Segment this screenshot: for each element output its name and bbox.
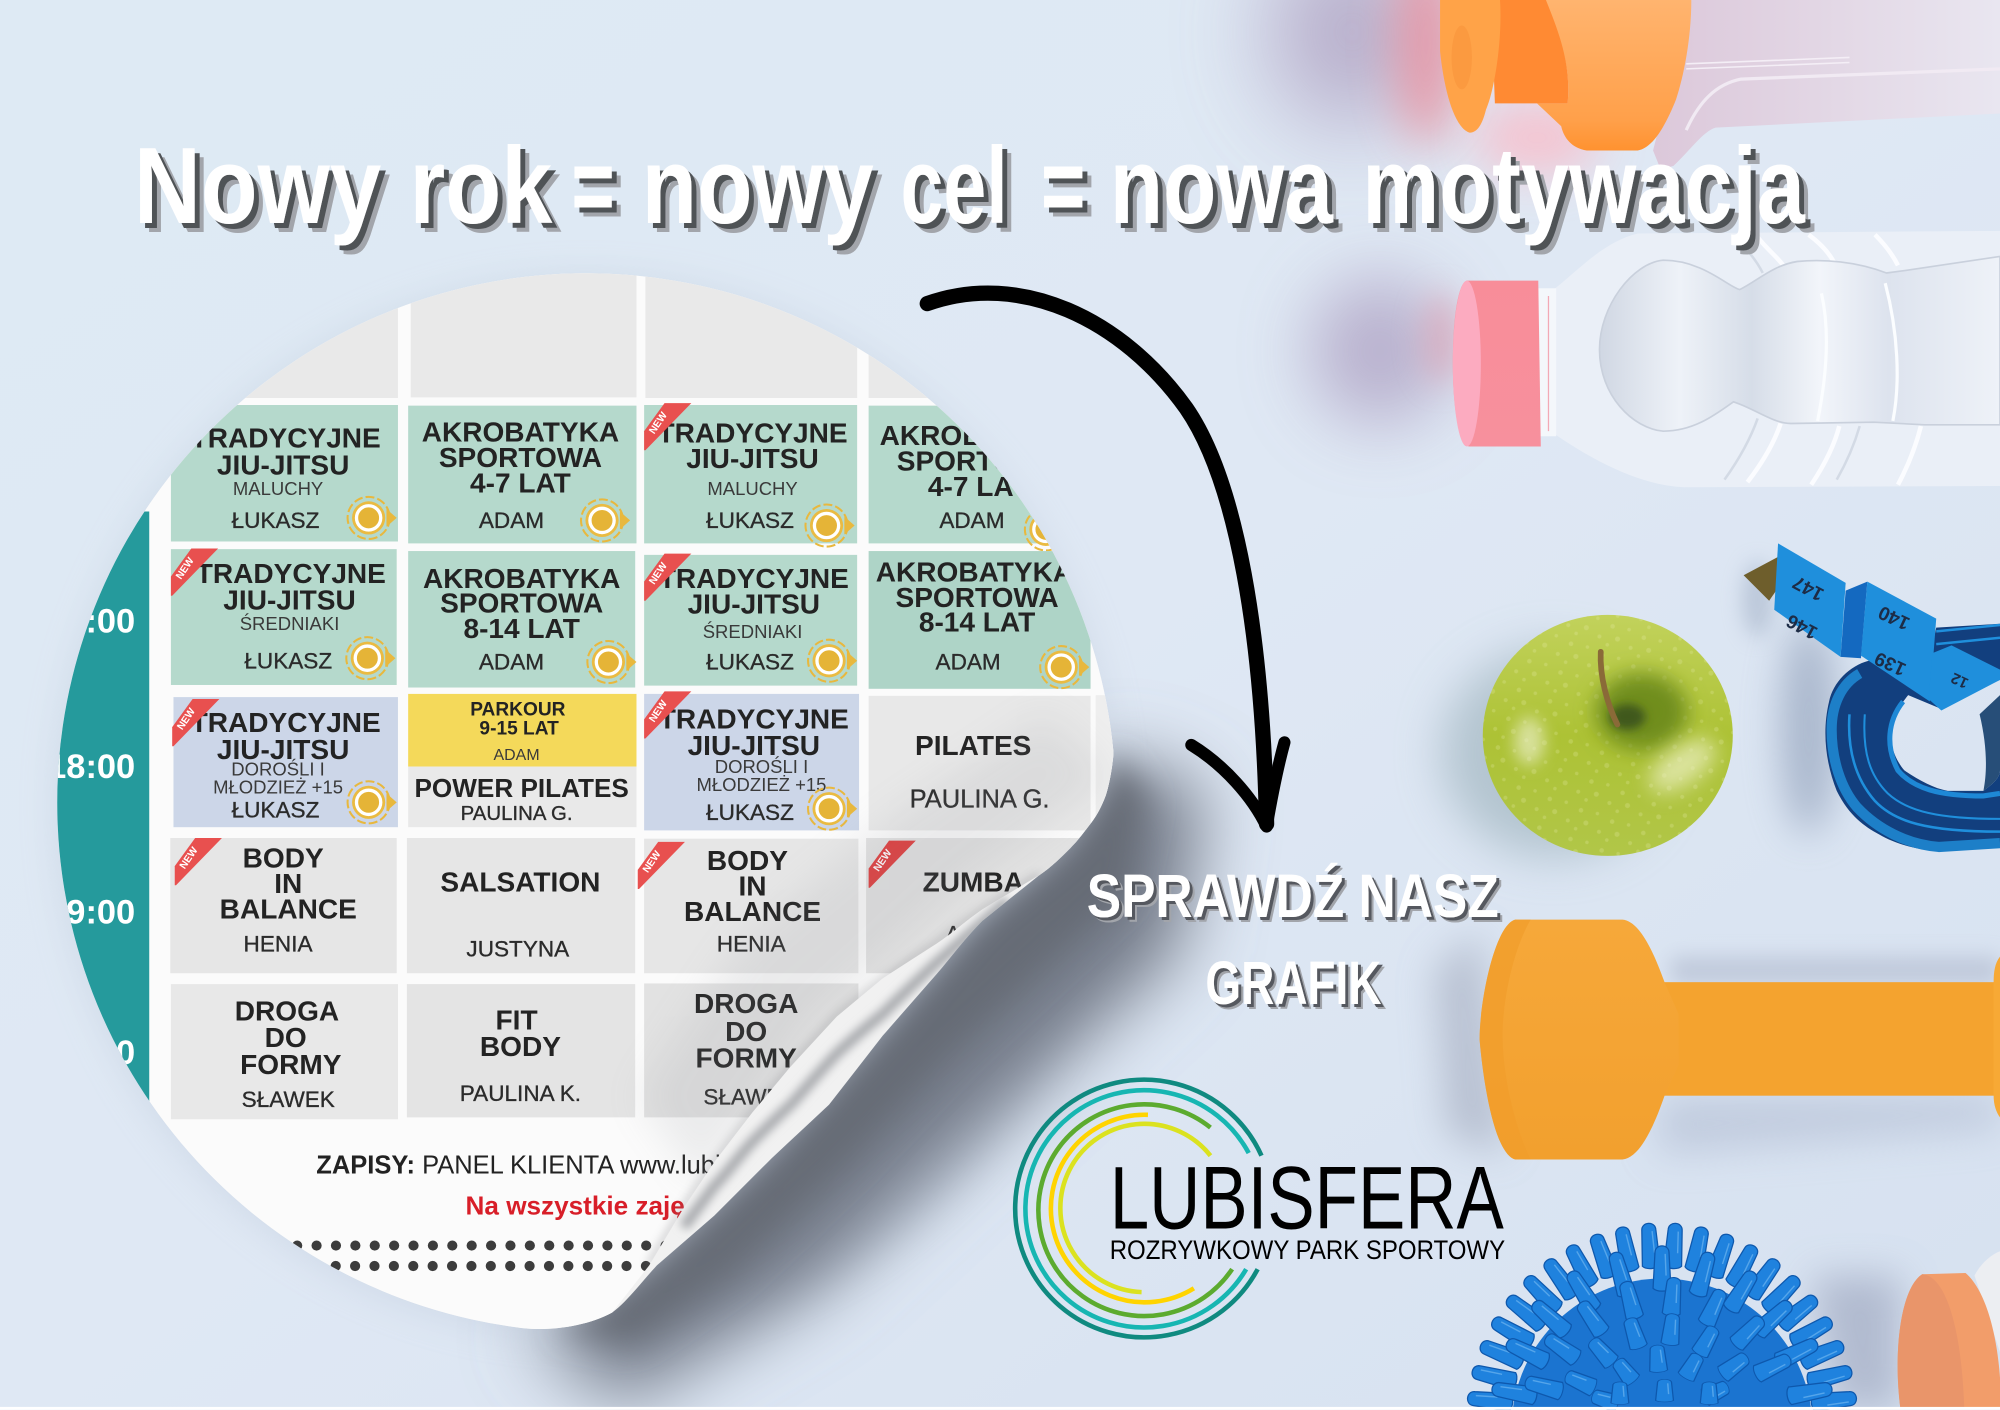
tape hole shading: [1980, 695, 2000, 791]
row 2: cell akrobatyka 8-14: SPORTOWA: [440, 587, 603, 618]
row 4: cell body in balance: BALANCE: [220, 893, 357, 924]
tape band three: [1929, 645, 2000, 710]
row 5: cell fit body: PAULINA K.: [460, 1081, 581, 1106]
new ribbon: NEW: [175, 706, 198, 732]
row 2: cell tradycyjne sredniaki: [171, 548, 397, 685]
row 3: cell tradycyjne dorosli second: TRADYCYJNE: [659, 703, 849, 734]
row 4: cell zumba: ANIA: [946, 921, 998, 946]
title: =: [1041, 125, 1085, 246]
row 3: cell tradycyjne dorosli second: [644, 691, 859, 830]
row 1: cell tradycyjne jiu-jitsu maluchy: [171, 405, 398, 541]
row 2: cell tradycyjne sredniaki second: ŁUKASZ: [706, 650, 794, 675]
title: motywacja: [1362, 125, 1805, 246]
tape numbers: 140: [1875, 601, 1913, 634]
arrow head: [1191, 742, 1284, 827]
row 4: cell salsation: SALSATION: [440, 867, 600, 898]
title: nowa: [1110, 125, 1333, 246]
call to action: GRAFIK: [1205, 949, 1381, 1017]
row 4: cell body in balance second: BALANCE: [684, 896, 821, 927]
row 1: cell tradycyjne jiu-jitsu maluchy: JIU-JITSU: [217, 450, 349, 481]
row 1: cell akrobatyka 4-7: [408, 406, 636, 543]
row 3: cell tradycyjne dorosli: MŁODZIEŻ +15: [213, 776, 343, 797]
row 3: cell pilates: [869, 695, 1114, 830]
row 5: cell droga do formy: FORMY: [240, 1049, 342, 1080]
row 1: cell tradycyjne jiu-jitsu maluchy: TRADYCYJNE: [191, 423, 381, 454]
soft ambient shadow: [57, 278, 1114, 1334]
photo: measuring tape: [1742, 543, 2000, 851]
apple body: [1483, 615, 1733, 856]
row 1: cell tradycyjne with new ribbon: [644, 403, 857, 547]
top empty row: [171, 230, 1098, 398]
row 4: cell zumba: [866, 838, 1096, 973]
footer: enrolment line: ZAPISY: PANEL KLIENTA www.lubisfera.pl: [316, 1151, 804, 1179]
orange shaker flange: [1537, 0, 1691, 151]
row 1: cell akrobatyka 4-7 second: AKROBATYKA: [880, 420, 1077, 451]
row 3: cell tradycyjne dorosli: [172, 697, 398, 827]
bottle ridges: [1747, 235, 1921, 485]
row 5: cell droga do formy: DO: [265, 1022, 307, 1053]
dumbbell handle: [1652, 982, 2000, 1096]
row 2: cell akrobatyka 8-14 second: [869, 551, 1091, 689]
row 2: cell tradycyjne sredniaki: ŁUKASZ: [244, 648, 332, 673]
white bottle behind cap: [1974, 1251, 2000, 1352]
tape brass tip: [1744, 556, 1781, 601]
soft coloured shadows behind bottles: [1269, 0, 1601, 425]
tape numbers: 147: [1790, 571, 1828, 605]
new ribbon: [644, 403, 691, 450]
row 3: cell parkour and power pilates: 9-15 LAT: [479, 719, 559, 740]
tape band two: [1861, 582, 1936, 702]
ball base: [1513, 1279, 1811, 1409]
title: cel: [901, 125, 1008, 246]
dark shadow under the curl: [555, 753, 1148, 1346]
row 5: cell fit body: BODY: [480, 1031, 561, 1062]
row 2: cell tradycyjne sredniaki second: JIU-JITSU: [688, 589, 820, 620]
translucent shaker body: [1653, 0, 2000, 170]
row 4: cell salsation: JUSTYNA: [466, 937, 569, 962]
row 5: cell droga do formy second: [644, 983, 858, 1117]
row 2: cell tradycyjne sredniaki: TRADYCYJNE: [196, 558, 386, 589]
arrow shaft: [927, 293, 1267, 824]
row 2: cell akrobatyka 8-14 second: 8-14 LAT: [919, 606, 1035, 637]
row 1: cell akrobatyka 4-7: 4-7 LAT: [470, 467, 571, 498]
call to action: [1087, 862, 1499, 1017]
row 2: cell tradycyjne sredniaki second: TRADYCYJNE: [659, 563, 849, 594]
photo: orange shaker bottle: [1440, 0, 2000, 170]
row 3: cell tradycyjne dorosli second: MŁODZIEŻ +15: [697, 774, 826, 795]
row 4: cell body in balance: BODY: [243, 842, 324, 873]
row 3: cell tradycyjne dorosli second: DOROŚLI I: [715, 756, 808, 777]
curved arrow: [927, 293, 1284, 827]
printed schedule: [0, 230, 1114, 1266]
apple stem: [1601, 652, 1617, 725]
footer: red note: Na wszystkie zajęcia obowiązują zapisy: [466, 1190, 957, 1220]
row 3: cell parkour and power pilates: PAULINA G.: [461, 803, 572, 825]
dumbbell shadow: [1435, 931, 1505, 1154]
row 3: cell parkour and power pilates: [408, 694, 636, 827]
photo: peach bottle cap: [1898, 1251, 2000, 1409]
tape numbers: 146: [1783, 609, 1821, 643]
photo: green apple: [1441, 615, 1733, 857]
row 3: cell parkour and power pilates: ADAM: [494, 747, 540, 764]
sticker drop shadow: [57, 278, 1205, 1403]
photo: blue spiky massage ball: [1467, 1223, 1857, 1410]
row 5: cell droga do formy: SŁAWEK: [242, 1087, 335, 1112]
row 2: cell tradycyjne sredniaki: JIU-JITSU: [223, 585, 356, 616]
row 4: cell body in balance: IN: [274, 868, 302, 899]
new ribbon: [644, 691, 691, 739]
tape coil: [1825, 624, 2000, 851]
row 4: cell body in balance second: IN: [739, 870, 767, 901]
row 1: cell tradycyjne jiu-jitsu maluchy: ŁUKASZ: [232, 508, 320, 533]
title: Nowy: [134, 125, 381, 246]
bottle inner bulge: [1599, 256, 2000, 431]
photo: water bottle: [1453, 231, 2000, 487]
row 1: cell akrobatyka 4-7 second: [869, 406, 1098, 550]
apple shading: [1514, 673, 1725, 803]
row 3: cell tradycyjne dorosli: DOROŚLI I: [231, 759, 325, 780]
row 1: cell tradycyjne jiu-jitsu maluchy: MALUCHY: [233, 478, 323, 499]
row 1: cell tradycyjne with new ribbon: JIU-JITSU: [686, 443, 819, 474]
footer: dotted strip: [297, 1246, 689, 1266]
row 4: cell body in balance second: [638, 839, 858, 973]
row 5: cell droga do formy: DROGA: [235, 995, 339, 1026]
row 2: cell tradycyjne sredniaki second: ŚREDNIAKI: [703, 621, 802, 642]
row 3: cell parkour and power pilates: PARKOUR: [470, 700, 566, 721]
row 3: cell pilates: PILATES: [915, 730, 1031, 761]
row 2: cell akrobatyka 8-14: [408, 551, 636, 688]
logo tagline: ROZRYWKOWY PARK SPORTOWY: [1110, 1235, 1505, 1265]
flap shading band: [684, 901, 1008, 1227]
tape coil bands: [1832, 673, 2000, 847]
new ribbon: [644, 554, 691, 601]
row 1: cell tradycyjne with new ribbon: MALUCHY: [707, 478, 798, 499]
title: [134, 125, 1805, 246]
calendar sticker: [0, 230, 1114, 1329]
new ribbon: [869, 841, 916, 888]
wide shadow under the curl: [523, 753, 1205, 1403]
row 5: cell droga do formy second: SŁAWEK: [703, 1085, 797, 1110]
new ribbon: NEW: [647, 410, 670, 436]
row 1: cell akrobatyka 4-7: ADAM: [479, 508, 544, 533]
new ribbon: NEW: [647, 561, 670, 587]
row 2: cell akrobatyka 8-14: 8-14 LAT: [463, 613, 580, 644]
tape numbers: 12: [1949, 669, 1971, 691]
row 2: cell akrobatyka 8-14 second: AKROBATYKA: [876, 557, 1073, 588]
broad shading toward the curl: [638, 714, 1110, 1186]
title: =: [571, 125, 615, 246]
row 5: cell fit body: FIT: [496, 1004, 538, 1035]
row 4: cell body in balance: HENIA: [244, 932, 313, 957]
contact shadow at the fold: [649, 875, 1040, 1265]
new ribbon: [638, 842, 685, 889]
new ribbon: NEW: [174, 556, 197, 582]
time column: [0, 512, 149, 1117]
row 4: cell zumba: ZUMBA: [923, 867, 1024, 898]
row 3: cell tradycyjne dorosli: TRADYCYJNE: [191, 707, 381, 738]
orange shaker nozzle: [1440, 0, 1500, 133]
photo: orange dumbbell: [1435, 920, 2000, 1159]
title: rok: [409, 125, 553, 246]
logo: Lubisfera: [1015, 1080, 1505, 1337]
ball spikes: [1467, 1223, 1857, 1410]
time column: 19:00: [47, 893, 135, 931]
new ribbon: [172, 699, 219, 746]
cap side: [1898, 1273, 2000, 1409]
row 3: cell tradycyjne dorosli second: ŁUKASZ: [706, 800, 794, 825]
row 3: cell tradycyjne dorosli second: JIU-JITSU: [688, 730, 820, 761]
row 4: cell body in balance second: HENIA: [717, 932, 786, 957]
row 2: cell akrobatyka 8-14 second: SPORTOWA: [895, 582, 1059, 613]
time column: 18:00: [47, 748, 135, 786]
row 3: cell tradycyjne dorosli: ŁUKASZ: [232, 798, 320, 823]
row 3: cell tradycyjne dorosli: JIU-JITSU: [217, 734, 349, 765]
new ribbon: [175, 838, 222, 885]
tape numbers: [1783, 571, 1971, 691]
call to action: SPRAWDŹ NASZ: [1087, 862, 1499, 930]
sticker paper: [57, 273, 1114, 1329]
row 1: cell akrobatyka 4-7: AKROBATYKA: [422, 416, 619, 447]
new ribbon: NEW: [641, 849, 664, 875]
tape shadow: [1781, 619, 1837, 835]
row 5: cell droga do formy: [171, 984, 398, 1119]
time labels: 17:00: [47, 603, 135, 641]
new ribbon: NEW: [872, 848, 895, 874]
row 2: cell tradycyjne sredniaki: ŚREDNIAKI: [240, 613, 339, 634]
new ribbon: NEW: [178, 845, 201, 871]
bottle body: [1548, 231, 2000, 487]
row 1: cell akrobatyka 4-7: SPORTOWA: [439, 442, 602, 473]
dumbbell second head: [1994, 957, 2000, 1117]
time column: 20:00: [47, 1034, 135, 1072]
row 5: cell droga do formy second: DROGA: [694, 988, 798, 1019]
new ribbon: NEW: [647, 698, 670, 725]
dumbbell head: [1480, 920, 1679, 1159]
row 4: cell body in balance second: BODY: [707, 845, 788, 876]
new ribbon: [171, 548, 218, 596]
row 1: cell tradycyjne with new ribbon: TRADYCYJNE: [657, 418, 848, 449]
row 1: cell akrobatyka 4-7 second: SPORTOWA: [897, 446, 1060, 477]
logo rings: [1015, 1080, 1261, 1337]
tape band one: [1774, 543, 1846, 657]
orange shaker neck: [1491, 0, 1568, 103]
peeled sticker flap: [57, 273, 1114, 1329]
row 2: cell akrobatyka 8-14 second: ADAM: [936, 650, 1001, 675]
row 3: cell pilates: PAULINA G.: [910, 785, 1050, 813]
row 5: cell fit body: [407, 984, 635, 1117]
row 1: cell akrobatyka 4-7 second: 4-7 LAT: [928, 471, 1029, 502]
row 5: cell droga do formy second: DO: [725, 1016, 767, 1047]
logo wordmark: LUBISFERA: [1110, 1147, 1504, 1247]
row 3: cell parkour and power pilates: POWER PILATES: [415, 773, 629, 803]
apple shadow: [1441, 648, 1666, 857]
row 1: cell tradycyjne with new ribbon: ŁUKASZ: [706, 508, 794, 533]
title: nowy: [642, 125, 874, 246]
photo: shadow between ball and cap: [1811, 1276, 1901, 1409]
row 2: cell akrobatyka 8-14: AKROBATYKA: [423, 563, 620, 594]
tape numbers: 139: [1872, 647, 1909, 679]
row 1: cell akrobatyka 4-7 second: ADAM: [939, 508, 1005, 533]
tape link: [1841, 582, 1867, 658]
row 2: cell tradycyjne sredniaki second: [644, 554, 857, 686]
row 4: cell body in balance: [170, 838, 397, 973]
cap front face: [1898, 1274, 1964, 1409]
bottle collar: [1538, 288, 1556, 436]
row 2: cell akrobatyka 8-14: ADAM: [479, 650, 544, 675]
row 5: cell droga do formy second: FORMY: [696, 1043, 797, 1074]
row 4: cell salsation: [407, 838, 635, 973]
pink bottle cap: [1453, 281, 1541, 446]
